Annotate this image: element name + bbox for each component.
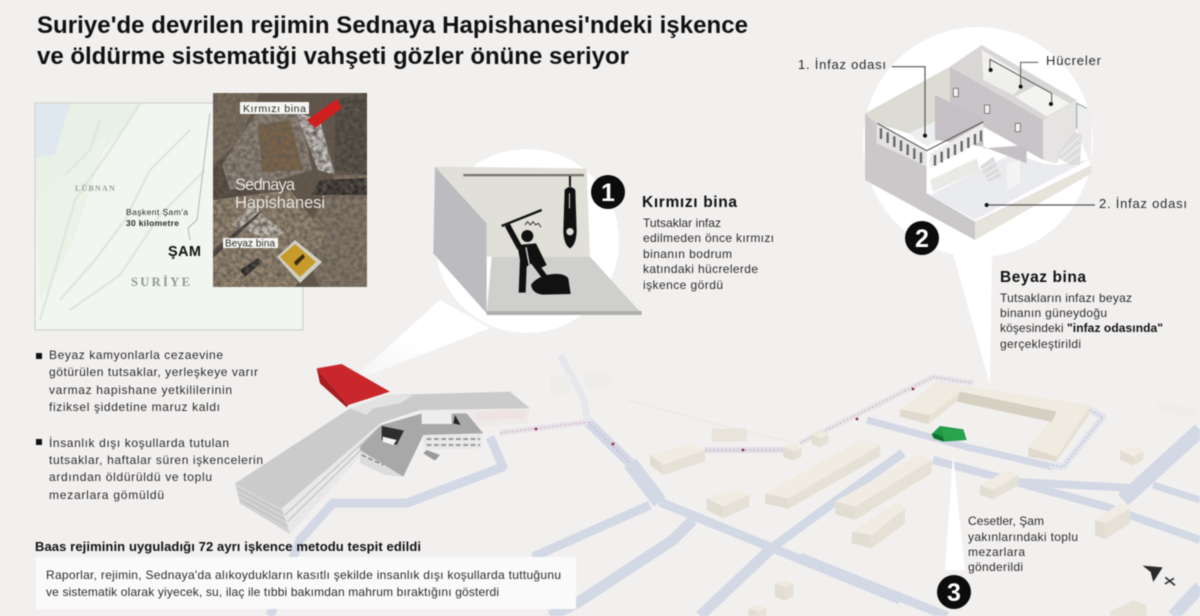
icon: green truck bbox=[932, 426, 967, 442]
badge 2 bbox=[905, 221, 939, 255]
text: Kırmızı bina: edilmeden önce kırmızı bbox=[643, 231, 774, 245]
red building bbox=[317, 364, 390, 405]
street map background bbox=[270, 355, 1200, 616]
long wing side bbox=[235, 420, 382, 534]
callout wedge to white building bbox=[952, 250, 992, 385]
text: Beyaz bina bbox=[1000, 269, 1163, 351]
distance line bbox=[188, 113, 210, 240]
bullet text 1: fiziksel şiddetine maruz kaldı bbox=[49, 400, 220, 414]
icon: torturer and victim bbox=[502, 210, 571, 295]
text: Cesetler: Cesetler, Şam bbox=[968, 514, 1044, 528]
text: Beyaz bina: binanın güneydoğu bbox=[1000, 306, 1107, 320]
panel: satellite image bbox=[213, 93, 367, 287]
bullet text 2: İnsanlık dışı koşullarda tutulan bbox=[49, 436, 229, 450]
note box bbox=[36, 557, 576, 609]
cell block bbox=[950, 45, 1077, 120]
text: Kırmızı bina: binanın bodrum bbox=[643, 247, 732, 261]
prison building 3D model bbox=[235, 364, 530, 534]
bullet text 2: ardından öldürüldü ve toplu bbox=[49, 470, 212, 484]
note box: Raporlar, rejimin, Sednaya'da alıkoydukların kasıtlı şekilde insanlık dışı koşullarda tuttuğunu bbox=[46, 568, 561, 582]
note box: ve sistematik olarak yiyecek, su, ilaç ile tıbbi bakımdan mahrum bıraktığını gösterdi bbox=[46, 585, 499, 599]
balcony railings bbox=[877, 123, 927, 167]
panel: location map bbox=[35, 103, 303, 330]
badge 3: 3 bbox=[947, 579, 961, 607]
roofs bbox=[235, 392, 530, 508]
panel: location map: ŞAM bbox=[168, 244, 201, 260]
icon: hanging prisoner bbox=[563, 176, 577, 248]
inner block bbox=[360, 413, 483, 477]
labels: rooms: 1. İnfaz odası bbox=[798, 57, 886, 72]
text: Cesetler bbox=[968, 514, 1078, 574]
cell doors bbox=[953, 88, 1020, 132]
title bbox=[37, 12, 748, 70]
badge 2: 2 bbox=[915, 225, 929, 253]
stairs bbox=[980, 157, 1002, 182]
panel: location map: Başkent Şam'a bbox=[126, 207, 188, 217]
panel: location map: 30 kilometre bbox=[126, 218, 179, 228]
text: Cesetler: yakınlarındaki toplu bbox=[968, 530, 1078, 544]
city buildings east group bbox=[835, 403, 1197, 616]
bullet text 1 bbox=[36, 348, 258, 414]
label Kırmızı bina: Kırmızı bina bbox=[243, 103, 306, 115]
text: Cesetler: gönderildi bbox=[968, 560, 1023, 574]
text: Kırmızı bina bbox=[642, 194, 774, 292]
map labels: LÜBNAN bbox=[75, 184, 116, 193]
badge 1 bbox=[591, 175, 625, 209]
text: Beyaz bina: gerçekleştirildi bbox=[1000, 337, 1081, 351]
bullet text 1: varmaz hapishane yetkililerinin bbox=[49, 383, 232, 397]
labels: rooms: Hücreler bbox=[1046, 53, 1102, 68]
panel: red building illustration bbox=[433, 149, 642, 333]
title: ve öldürme sistematiği vahşeti gözler önüne seriyor bbox=[37, 43, 629, 70]
panel: bottom note bbox=[35, 539, 576, 609]
text: Kırmızı bina: Tutsaklar infaz bbox=[643, 216, 721, 230]
text: Kırmızı bina: Kırmızı bina bbox=[642, 194, 737, 211]
bullet text 2: tutsaklar, haftalar süren işkencelerin bbox=[49, 453, 263, 467]
text: Cesetler: mezarlara bbox=[968, 545, 1025, 559]
bullet text 2 bbox=[36, 436, 263, 502]
room 1 back wall bbox=[865, 67, 950, 140]
outer base bbox=[865, 113, 975, 240]
title: Suriye'de devrilen rejimin Sednaya Hapishanesi'ndeki işkence bbox=[37, 12, 748, 39]
east wing side bbox=[420, 408, 530, 426]
callout wedge to red building bbox=[358, 300, 490, 378]
label Beyaz bina: Beyaz bina bbox=[225, 238, 275, 250]
bullet text 1: götürülen tutsaklar, yerleşkeye varır bbox=[49, 365, 258, 379]
prisoner route dots bbox=[500, 377, 973, 463]
text: Kırmızı bina: işkence gördü bbox=[643, 278, 723, 292]
text: Beyaz bina: Beyaz bina bbox=[1000, 269, 1086, 286]
badge 3 bbox=[937, 575, 971, 609]
white building complex bbox=[900, 382, 1090, 462]
note heading: Baas rejiminin uyguladığı 72 ayrı işkence metodu tespit edildi bbox=[35, 539, 421, 554]
door bbox=[1007, 160, 1020, 190]
prison name: Sednaya bbox=[235, 176, 296, 194]
panel: satellite image: Hapishanesi bbox=[235, 194, 325, 212]
bullet text 2: mezarlara gömüldü bbox=[49, 488, 164, 502]
panel: white building illustration bbox=[863, 27, 1095, 257]
text: Beyaz bina: köşesindeki "infaz odasında" bbox=[1000, 321, 1163, 335]
room bbox=[433, 167, 642, 315]
city buildings west group bbox=[550, 373, 881, 616]
text: Beyaz bina: Tutsakların infazı beyaz bbox=[1000, 291, 1132, 305]
leader lines bbox=[892, 59, 1095, 205]
bullet text 1: Beyaz kamyonlarla cezaevine bbox=[49, 348, 223, 362]
callout wedge to truck bbox=[945, 455, 965, 570]
labels: rooms: 2. İnfaz odası bbox=[1099, 196, 1187, 211]
badge 1: 1 bbox=[601, 179, 615, 207]
labels: rooms bbox=[798, 53, 1187, 211]
icon: compass arrow bbox=[1143, 566, 1175, 585]
panel: location map: SURİYE bbox=[131, 275, 190, 289]
text: Kırmızı bina: katındaki hücrelerde bbox=[643, 262, 758, 276]
red building marker bbox=[307, 99, 342, 128]
